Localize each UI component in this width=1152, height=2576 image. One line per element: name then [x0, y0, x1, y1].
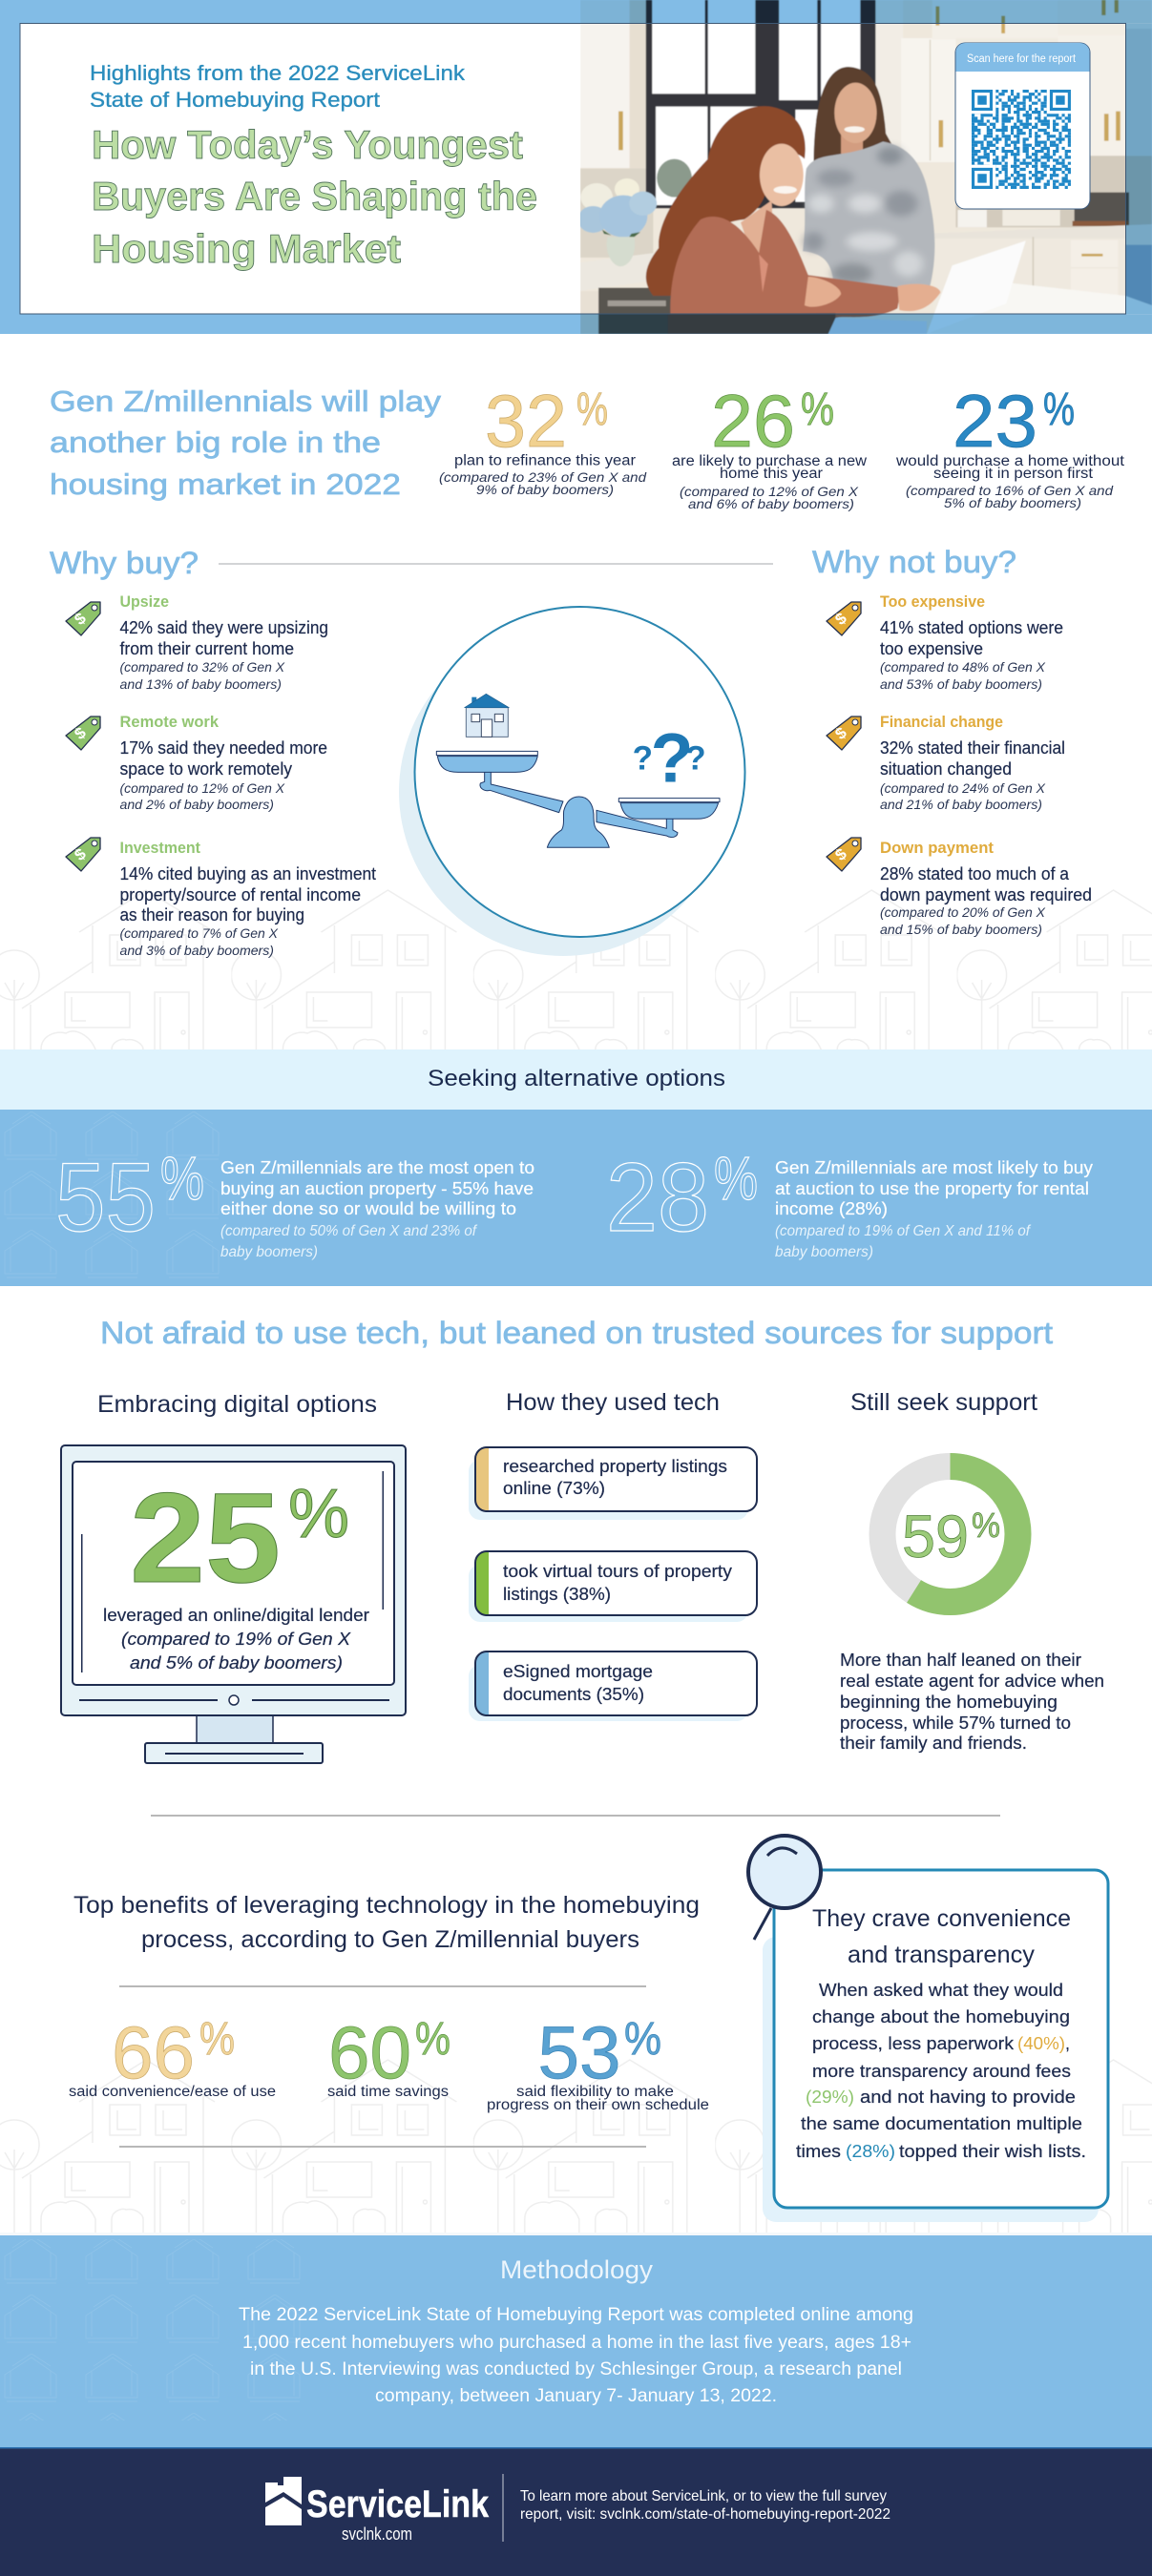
icon: gold price tag [827, 838, 861, 871]
illustration: scale with house and question marks in a circle [399, 607, 744, 956]
stat: 23%: seeing it in person first [933, 466, 1094, 482]
stat: 28%: income (28%) [775, 1199, 888, 1218]
reason: Remote work: 17% said they needed more [120, 738, 327, 758]
panel: callout convenience and transparency: the same documentation multiple [801, 2114, 1082, 2133]
stat: 66%: said convenience/ease of use [69, 2084, 276, 2100]
chart: 59% donut: % [972, 1506, 1000, 1545]
icon: gold price tag: $ [831, 723, 850, 743]
heading: Gen Z/millennials role: housing market in 2022 [50, 467, 401, 501]
panel: callout convenience and transparency: (40%) [1017, 2034, 1065, 2053]
reason: Upsize: 42% said they were upsizing [120, 618, 328, 637]
reason: Financial change [827, 713, 1065, 812]
stat: 53% [487, 2010, 709, 2113]
illustration: desktop monitor with 25% stat [61, 1445, 406, 1763]
logo: ServiceLink wordmark: ServiceLink [306, 2483, 490, 2525]
heading: top benefits: process, according to Gen Z/millennial buyers [141, 1926, 639, 1953]
stat: 66%: 66 [112, 2010, 195, 2094]
heading: Gen Z/millennials role: Gen Z/millennials will play [50, 384, 442, 418]
reason: Too expensive: too expensive [880, 639, 983, 658]
tinted frame bands [580, 0, 1152, 334]
icon: question marks: ? [633, 740, 653, 778]
hero title: Buyers Are Shaping the [92, 174, 537, 218]
stat: 23%: 23 [953, 379, 1037, 463]
stat: 55%: buying an auction property - 55% have [220, 1179, 534, 1198]
panel: callout convenience and transparency: (28%) [846, 2142, 895, 2161]
stat: 25%: % [288, 1476, 349, 1552]
section banner: Seeking alternative options [0, 1049, 1152, 1110]
section heading: tech and trusted sources: Not afraid to use tech, but leaned on trusted sources for support [100, 1316, 1053, 1350]
text: more than half leaned on agent [840, 1651, 1104, 1753]
reason: Investment: and 3% of baby boomers) [120, 943, 274, 958]
stat: 23% [895, 379, 1125, 510]
card: eSigned mortgage documents: eSigned mortgage [503, 1662, 653, 1681]
reason: Investment: property/source of rental income [120, 885, 361, 904]
reason: Down payment: down payment was required [880, 885, 1092, 904]
reason: Investment: Investment [120, 839, 200, 857]
stat: 60%: 60 [328, 2010, 411, 2094]
card: researched property listings: researched property listings [503, 1457, 727, 1476]
reason: Investment [66, 838, 376, 958]
standing woman [813, 67, 892, 165]
panel: methodology: The 2022 ServiceLink State of Homebuying Report was completed online among [239, 2305, 913, 2325]
panel: callout convenience and transparency: more transparency around fees [812, 2062, 1071, 2081]
reason: Financial change: situation changed [880, 759, 1012, 779]
stat: 66% [69, 2010, 276, 2100]
card: eSigned mortgage documents: documents (35%) [503, 1685, 644, 1704]
panel: callout convenience and transparency [748, 1836, 1108, 2222]
hero title [92, 122, 537, 271]
reason: Down payment: (compared to 20% of Gen X [880, 904, 1046, 920]
stat: 55%: % [160, 1144, 204, 1213]
text: more than half leaned on agent: their family and friends. [840, 1734, 1027, 1753]
panel: methodology: 1,000 recent homebuyers who purchased a home in the last five years, ages 18+ [242, 2333, 911, 2353]
reason: Down payment: and 15% of baby boomers) [880, 922, 1042, 937]
stat: 26%: and 6% of baby boomers) [688, 496, 854, 511]
stat: 32% [439, 379, 647, 497]
icon: house [465, 694, 509, 737]
card: eSigned mortgage documents [469, 1652, 757, 1721]
icon: gold price tag: $ [831, 844, 850, 864]
laptop [927, 240, 1026, 334]
stat: 28%: 28 [606, 1143, 709, 1252]
panel: why buy reasons [66, 592, 376, 958]
reason: Remote work: Remote work [120, 713, 220, 731]
stat: 28% [606, 1143, 1093, 1260]
illustration: desktop monitor with 25% stat: and 5% of baby boomers) [130, 1653, 343, 1672]
stat: 26%: home this year [720, 466, 823, 482]
reason: Upsize: (compared to 32% of Gen X [120, 659, 285, 675]
reason: Financial change: and 21% of baby boomers) [880, 797, 1042, 812]
icon: magnifying glass [748, 1836, 821, 1940]
stat: 28%: Gen Z/millennials are most likely to buy [775, 1158, 1093, 1177]
icon: gold price tag [827, 602, 861, 635]
reason: Investment: as their reason for buying [120, 905, 304, 924]
reason: Too expensive: Too expensive [880, 592, 985, 611]
reason: Financial change: Financial change [880, 713, 1003, 731]
icon: gold price tag: $ [831, 609, 850, 629]
stat: 55%: (compared to 50% of Gen X and 23% of [220, 1223, 478, 1239]
reason: Down payment: 28% stated too much of a [880, 864, 1070, 883]
hero title: Housing Market [92, 226, 401, 271]
panel: methodology: company, between January 7- January 13, 2022. [375, 2386, 777, 2406]
stat: 60% [327, 2010, 450, 2100]
stat: 26%: % [801, 384, 834, 435]
heading: Why not buy?: Why not buy? [812, 545, 1016, 579]
stat: 26%: (compared to 12% of Gen X [680, 484, 859, 499]
panel: footer [0, 2447, 1152, 2576]
column heading: How they used tech: How they used tech [506, 1389, 720, 1416]
flowers [580, 183, 613, 208]
card: researched property listings: online (73%) [503, 1479, 605, 1498]
reason: Down payment: Down payment [880, 839, 994, 857]
stat: 23%: % [1043, 384, 1075, 435]
stat: 32%: 32 [485, 379, 567, 463]
stat: 23%: 5% of baby boomers) [944, 495, 1081, 510]
panel: callout convenience and transparency: They crave convenience [812, 1905, 1071, 1932]
QR code card [955, 43, 1090, 209]
QR code card: Scan here for the report [967, 53, 1077, 65]
reason: Financial change: 32% stated their financial [880, 738, 1065, 758]
reason: Remote work: and 2% of baby boomers) [120, 797, 274, 812]
illustration: desktop monitor with 25% stat: (compared to 19% of Gen X [121, 1630, 351, 1649]
reason: Too expensive: (compared to 48% of Gen X [880, 659, 1046, 675]
background: house outlines (upper) [0, 878, 1152, 1049]
panel: callout convenience and transparency: When asked what they would [819, 1981, 1063, 2000]
stat: 32%: (compared to 23% of Gen X and [439, 469, 647, 485]
chart: 59% donut: 59 [902, 1504, 969, 1570]
seated woman [646, 106, 806, 296]
stat: 53%: said flexibility to make [516, 2084, 674, 2100]
panel: footer: svclnk.com [342, 2524, 412, 2544]
reason: Upsize: Upsize [120, 592, 169, 611]
hero subtitle: State of Homebuying Report [90, 88, 380, 112]
panel: methodology: in the U.S. Interviewing was conducted by Schlesinger Group, a research panel [250, 2359, 902, 2379]
reason: Remote work: (compared to 12% of Gen X [120, 780, 285, 796]
reason: Financial change: (compared to 24% of Gen X [880, 780, 1046, 796]
stat: 26% [672, 379, 868, 511]
reason: Remote work [66, 713, 327, 812]
hero title: How Today’s Youngest [92, 122, 523, 167]
heading: Gen Z/millennials role [50, 384, 442, 501]
stat: 66%: % [199, 2014, 235, 2065]
panel: callout convenience and transparency: (29%) [806, 2088, 854, 2107]
stat: 55% [55, 1143, 534, 1260]
card: took virtual tours [469, 1551, 757, 1622]
icon: gold price tag [827, 717, 861, 750]
icon: green price tag [66, 717, 100, 750]
stat: 28%: at auction to use the property for rental [775, 1179, 1089, 1198]
panel: callout convenience and transparency: and not having to provide [860, 2088, 1076, 2107]
stat: 60%: said time savings [327, 2084, 449, 2100]
icon: green price tag: $ [71, 723, 90, 743]
panel: callout convenience and transparency: topped their wish lists. [899, 2142, 1086, 2161]
reason: Investment: (compared to 7% of Gen X [120, 925, 279, 941]
reason: Too expensive [827, 592, 1063, 692]
stat: 23%: (compared to 16% of Gen X and [906, 483, 1114, 498]
hero subtitle [90, 61, 466, 112]
stat: 28%: (compared to 19% of Gen X and 11% of [775, 1223, 1032, 1239]
stat: 32%: plan to refinance this year [454, 452, 636, 469]
stat: 26%: 26 [711, 379, 795, 463]
heading: top benefits: Top benefits of leveraging technology in the homebuying [73, 1892, 700, 1919]
stat: 25% [130, 1467, 349, 1610]
panel: hero header [0, 0, 1152, 334]
panel: auction stats [0, 1110, 1152, 1286]
photo: two women looking at a laptop in a kitchen [577, 0, 1152, 334]
stat: 55%: 55 [55, 1143, 156, 1252]
chart: 59% donut [882, 1466, 1017, 1602]
reason: Upsize: and 13% of baby boomers) [120, 676, 282, 692]
stat: 32%: % [576, 384, 608, 435]
panel: callout convenience and transparency: change about the homebuying [812, 2007, 1070, 2026]
column heading: Embracing digital options: Embracing digital options [97, 1391, 377, 1418]
hero frame outline [20, 23, 1126, 314]
stat: 55%: baby boomers) [220, 1244, 318, 1260]
stat: 53%: 53 [538, 2010, 620, 2094]
heading: top benefits [73, 1892, 700, 1953]
text: learn more link: report, visit: svclnk.com/state-of-homebuying-report-2022 [520, 2506, 890, 2523]
panel: methodology [0, 2235, 1152, 2447]
panel: why not buy reasons [827, 592, 1092, 937]
section banner: Seeking alternative options: Seeking alternative options [428, 1066, 725, 1091]
card: researched property listings [469, 1447, 757, 1520]
stat: 28%: % [714, 1144, 758, 1213]
logo: ServiceLink house mark [265, 2477, 302, 2525]
stat: 55%: Gen Z/millennials are the most open to [220, 1158, 534, 1177]
reason: Too expensive: 41% stated options were [880, 618, 1063, 637]
stat: 23%: would purchase a home without [895, 453, 1125, 469]
heading: Why buy?: Why buy? [50, 546, 199, 580]
text: learn more link [520, 2488, 890, 2523]
stat: 55%: either done so or would be willing to [220, 1199, 516, 1218]
reason: Upsize [66, 592, 328, 692]
reason: Down payment [827, 838, 1092, 937]
illustration: desktop monitor with 25% stat: leveraged an online/digital lender [103, 1606, 369, 1625]
text: more than half leaned on agent: beginning the homebuying [840, 1693, 1058, 1712]
background: house outlines (lower) [0, 2047, 1152, 2233]
icon: question marks: ? [685, 740, 706, 778]
heading: Gen Z/millennials role: another big role in the [50, 426, 381, 459]
stat: 60%: % [415, 2014, 450, 2065]
panel: callout convenience and transparency: and transparency [848, 1942, 1035, 1968]
panel: callout convenience and transparency: times [796, 2142, 841, 2161]
text: more than half leaned on agent: More than half leaned on their [840, 1651, 1081, 1670]
card: took virtual tours: took virtual tours of property [503, 1562, 732, 1581]
panel: callout convenience and transparency: , [1065, 2034, 1070, 2053]
stat: 25%: 25 [130, 1467, 281, 1610]
icon: green price tag: $ [71, 844, 90, 864]
icon: question marks: ? [651, 718, 693, 797]
QR code [972, 90, 1071, 189]
hero subtitle: Highlights from the 2022 ServiceLink [90, 61, 466, 85]
panel: callout convenience and transparency: process, less paperwork [812, 2034, 1015, 2053]
reason: Investment: 14% cited buying as an investment [120, 864, 376, 883]
icon: green price tag: $ [71, 609, 90, 629]
text: more than half leaned on agent: process, while 57% turned to [840, 1714, 1071, 1733]
reason: Too expensive: and 53% of baby boomers) [880, 676, 1042, 692]
stat: 53%: progress on their own schedule [487, 2097, 709, 2113]
stat: 28%: baby boomers) [775, 1244, 873, 1260]
card: took virtual tours: listings (38%) [503, 1585, 611, 1604]
icon: green price tag [66, 838, 100, 871]
stat: 26%: are likely to purchase a new [672, 453, 868, 469]
reason: Remote work: space to work remotely [120, 759, 292, 779]
icon: green price tag [66, 602, 100, 635]
column heading: Still seek support: Still seek support [850, 1389, 1037, 1416]
icon: question marks [633, 718, 706, 797]
stat: 53%: % [624, 2014, 661, 2065]
text: more than half leaned on agent: real estate agent for advice when [840, 1672, 1104, 1691]
text: learn more link: To learn more about ServiceLink, or to view the full survey [520, 2488, 887, 2504]
reason: Upsize: from their current home [120, 639, 294, 658]
panel: methodology: Methodology [500, 2255, 654, 2284]
stat: 32%: 9% of baby boomers) [476, 482, 614, 497]
